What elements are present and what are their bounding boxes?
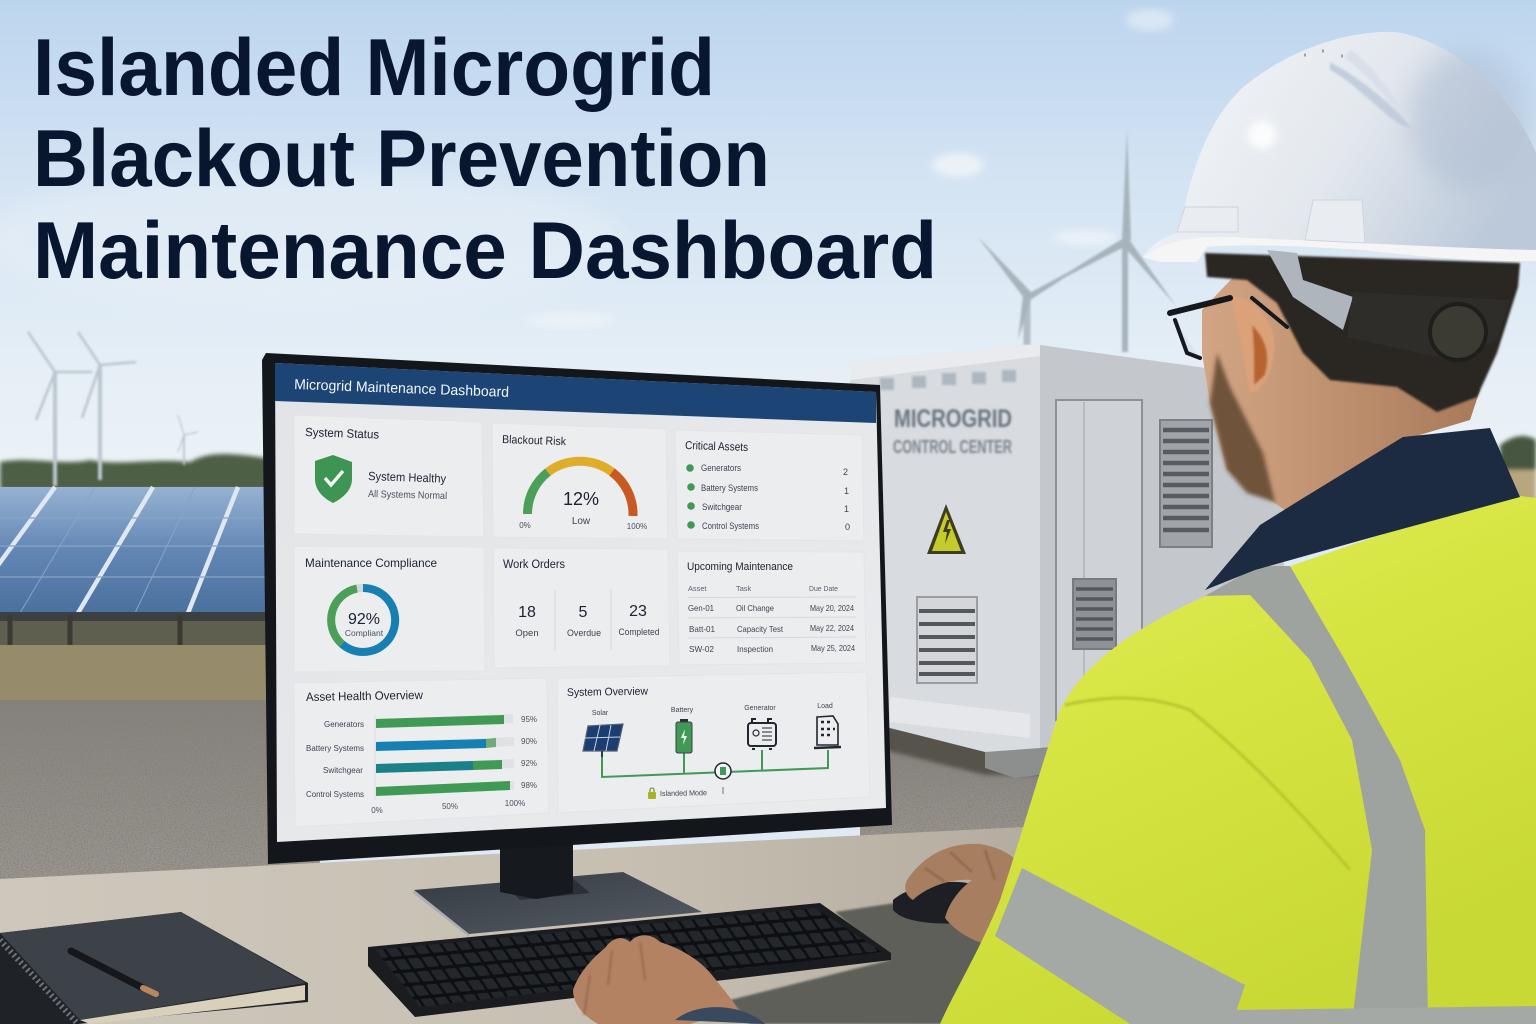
gauge label: Low	[572, 516, 591, 527]
helmet brim slots	[1177, 200, 1365, 243]
stat: overdue	[567, 604, 601, 639]
panel: system overview	[557, 672, 870, 813]
container door	[1056, 400, 1142, 720]
bar labels	[306, 719, 364, 799]
heading: Maintenance Compliance	[305, 556, 437, 570]
node labels: Load	[817, 703, 833, 710]
stat: open	[515, 604, 539, 639]
title	[33, 23, 937, 296]
mouse	[893, 882, 972, 924]
shadow under container	[885, 725, 1060, 775]
panel: blackout risk	[492, 423, 668, 539]
maintenance table: May 22, 2024	[810, 623, 854, 633]
icon: shield check	[315, 455, 352, 503]
donut chart	[331, 588, 395, 652]
donut label: Compliant	[345, 628, 384, 638]
sign: MICROGRID CONTROL CENTER: MICROGRID	[894, 405, 1012, 433]
wind turbines, right group	[978, 130, 1176, 352]
node labels	[592, 703, 833, 717]
monitor stand neck	[500, 845, 573, 899]
icon: generator	[748, 719, 776, 749]
stat: completed	[618, 603, 660, 638]
monitor base	[413, 872, 702, 937]
donut value: 92%	[348, 611, 380, 628]
status text: System Healthy	[368, 469, 446, 486]
bar labels: Battery Systems	[306, 743, 364, 753]
heading: System Overview	[567, 686, 648, 699]
desk surface	[0, 826, 1045, 1024]
asset list: Generators	[701, 463, 741, 473]
panel: upcoming maintenance	[677, 551, 866, 665]
node labels: Battery	[671, 707, 694, 714]
maintenance table: SW-02	[689, 644, 714, 654]
gauge scale: 0%	[519, 521, 531, 530]
icon: load building	[814, 716, 841, 748]
asset list: 1	[844, 486, 849, 496]
maintenance table	[688, 584, 856, 654]
panel: work orders	[493, 548, 670, 668]
left hand on keyboard	[573, 935, 738, 1024]
hard hat	[1143, 32, 1536, 262]
gauge scale: 100%	[627, 522, 647, 531]
microgrid control center container	[850, 344, 1290, 778]
pen	[71, 951, 156, 994]
status text: All Systems Normal	[368, 489, 447, 502]
ear	[1230, 297, 1274, 393]
beard	[1210, 353, 1275, 502]
title: Maintenance Dashboard	[33, 206, 937, 296]
collar	[1205, 428, 1520, 590]
maintenance table: Batt-01	[689, 624, 715, 634]
heading: Upcoming Maintenance	[687, 561, 793, 573]
reflective arm stripe	[995, 868, 1245, 1024]
maintenance table: Asset	[688, 584, 706, 593]
heading: System Status	[305, 425, 379, 442]
side vent large	[1160, 420, 1212, 547]
wind turbines, left group	[28, 332, 198, 486]
keyboard	[368, 903, 891, 1017]
asset list: 2	[843, 467, 848, 477]
reflective shoulder stripe	[1205, 566, 1428, 1024]
neck and face	[1202, 270, 1480, 510]
safety glasses	[1170, 298, 1287, 358]
container side face	[1040, 345, 1290, 748]
asset list	[686, 463, 850, 532]
panel: asset health overview	[294, 678, 549, 827]
bar axis	[371, 799, 525, 815]
status text	[368, 469, 447, 502]
dashboard header bar	[275, 363, 876, 423]
ground: field and gravel	[0, 640, 1100, 890]
sign: MICROGRID CONTROL CENTER	[893, 405, 1012, 457]
node labels: Generator	[744, 705, 776, 712]
dark desk reflection	[730, 903, 1000, 1024]
panel: critical assets	[675, 430, 864, 541]
gauge chart	[527, 461, 633, 516]
dashboard title: Microgrid Maintenance Dashboard	[294, 377, 509, 401]
bar values: 92%	[521, 759, 537, 768]
notebook	[0, 912, 308, 1024]
right hand on mouse	[905, 844, 1027, 948]
hair	[1205, 253, 1520, 412]
connection lines	[602, 750, 828, 777]
icon: switch node	[715, 763, 731, 779]
solar array	[0, 487, 300, 645]
maintenance table: Task	[736, 584, 751, 593]
jacket	[940, 496, 1536, 1024]
heading: Critical Assets	[685, 440, 748, 454]
asset list: 0	[845, 522, 850, 532]
headband strap	[1267, 250, 1510, 360]
panel: maintenance compliance	[294, 546, 485, 672]
bar values: 95%	[521, 715, 537, 724]
worker	[940, 32, 1536, 1024]
helmet ridge details	[1330, 50, 1413, 128]
stat: completed: Completed	[618, 627, 660, 638]
container front face	[850, 344, 1040, 768]
bar values: 90%	[521, 737, 537, 746]
sign: MICROGRID CONTROL CENTER: CONTROL CENTER	[893, 437, 1012, 457]
bar labels: Generators	[324, 719, 364, 729]
islanded mode label: Islanded Mode	[660, 788, 707, 798]
jacket seam	[1065, 698, 1350, 870]
bar axis: 100%	[505, 799, 525, 808]
monitor bezel	[262, 353, 892, 864]
icon: warning triangle	[927, 504, 966, 554]
helmet highlight	[1248, 121, 1276, 149]
icon: battery	[676, 719, 692, 753]
asset list: Battery Systems	[701, 483, 758, 493]
stat: open: 18	[518, 604, 536, 621]
bar values: 98%	[521, 781, 537, 790]
bar axis: 0%	[371, 806, 383, 815]
maintenance table: Oil Change	[736, 603, 774, 613]
panel: system status	[294, 415, 484, 537]
gauge value: 12%	[563, 489, 599, 509]
title: Blackout Prevention	[33, 114, 770, 204]
helmet vent holes	[1304, 51, 1343, 56]
bar axis: 50%	[442, 802, 458, 811]
sleeve	[675, 1007, 765, 1024]
maintenance table: Capacity Test	[737, 624, 784, 634]
front vent louvres	[917, 597, 977, 683]
asset list: 1	[844, 504, 849, 514]
helmet shading	[1410, 50, 1530, 190]
maintenance table: May 20, 2024	[810, 603, 854, 613]
maintenance table: Due Date	[809, 584, 838, 593]
gauge scale	[519, 521, 647, 531]
node labels: Solar	[592, 710, 609, 717]
title: Islanded Microgrid	[33, 23, 715, 113]
stat: open: Open	[515, 628, 539, 639]
distant trees	[0, 436, 1536, 510]
icon: solar panel	[583, 724, 623, 757]
bar chart	[375, 714, 514, 800]
heading: Work Orders	[503, 559, 565, 571]
maintenance table: May 25, 2024	[811, 643, 855, 653]
side vent small	[1073, 579, 1116, 649]
asset list: Switchgear	[702, 502, 742, 512]
notebook spiral	[0, 940, 78, 1024]
maintenance table: Gen-01	[688, 603, 714, 613]
monitor screen	[275, 363, 886, 842]
reflective lower stripe	[1232, 1006, 1536, 1024]
bar values	[521, 715, 537, 790]
stat: overdue: 5	[579, 604, 588, 621]
bar labels: Switchgear	[323, 765, 363, 775]
icon: lock	[648, 788, 656, 799]
photo background: sky	[0, 0, 1536, 500]
heading: Blackout Risk	[502, 434, 566, 448]
brim underside	[1143, 237, 1536, 262]
stat: completed: 23	[629, 603, 647, 620]
bar labels: Control Systems	[306, 789, 364, 799]
maintenance table: Inspection	[737, 644, 773, 654]
heading: Asset Health Overview	[306, 688, 423, 704]
asset list: Control Systems	[702, 521, 759, 531]
stat: overdue: Overdue	[567, 628, 601, 639]
